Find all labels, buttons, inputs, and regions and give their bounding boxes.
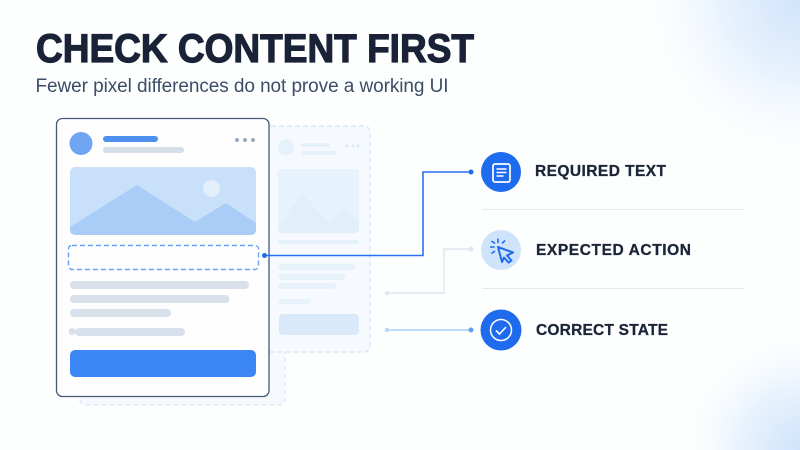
- back ghost card: [80, 352, 285, 405]
- main card: [56, 118, 269, 396]
- title: CHECK CONTENT FIRST: [36, 27, 474, 71]
- icon: cursor click: [481, 230, 521, 270]
- light connector: correct state: [385, 328, 474, 332]
- label: EXPECTED ACTION: [536, 242, 691, 259]
- dashed content slot: [68, 246, 258, 270]
- button: [70, 350, 256, 377]
- avatar: [70, 132, 92, 155]
- image placeholder: [70, 167, 256, 235]
- ghost card: [265, 126, 370, 352]
- row: correct state: [480, 310, 668, 350]
- blue connector: required text: [262, 170, 474, 258]
- menu dots: [235, 138, 255, 142]
- row: expected action: [481, 230, 691, 270]
- header lines: [103, 136, 184, 153]
- icon: document: [481, 152, 521, 192]
- label: REQUIRED TEXT: [535, 163, 667, 180]
- icon: check circle: [480, 310, 522, 350]
- label: CORRECT STATE: [536, 322, 668, 339]
- gray connector: expected action: [385, 246, 474, 295]
- subtitle: Fewer pixel differences do not prove a working UI: [36, 76, 448, 97]
- row: required text: [481, 152, 667, 192]
- text lines: [68, 281, 249, 336]
